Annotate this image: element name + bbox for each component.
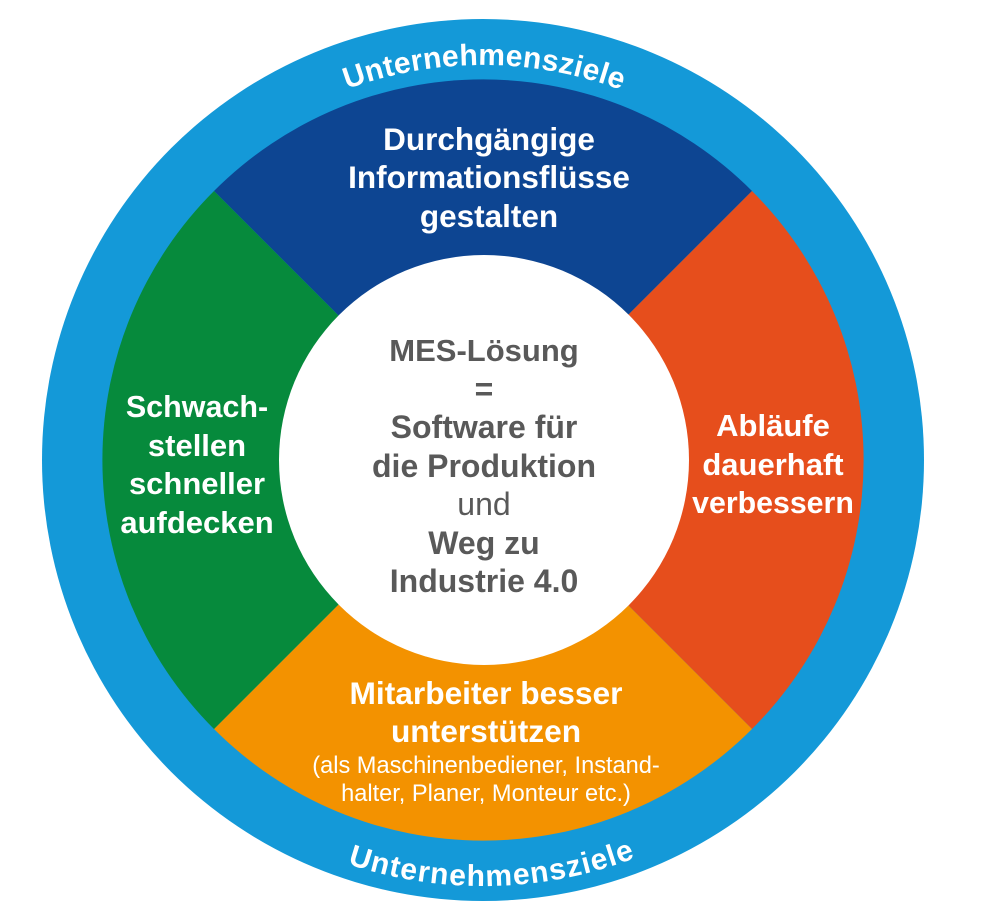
center circle: MES-Lösung: Weg zu — [428, 525, 540, 561]
segment: Schwachstellen schneller aufdecken — [102, 191, 483, 729]
segment: Schwachstellen schneller aufdecken: Schwach- — [126, 390, 268, 424]
ring label top: Unternehmensziele — [342, 44, 624, 88]
segment: Mitarbeiter besser unterstützen: Mitarbeiter besser — [350, 675, 622, 711]
center circle: MES-Lösung: und — [457, 486, 511, 522]
center circle: MES-Lösung: Industrie 4.0 — [390, 563, 578, 599]
segment: Durchgängige Informationsflüsse gestalten: Informationsflüsse — [348, 159, 630, 195]
center circle: MES-Lösung: Software für — [391, 409, 577, 445]
segment: Mitarbeiter besser unterstützen: halter, Planer, Monteur etc.) — [341, 781, 631, 807]
segment: Schwachstellen schneller aufdecken: stellen — [148, 428, 246, 463]
ring label bottom: Unternehmensziele — [350, 844, 633, 886]
segment: Mitarbeiter besser unterstützen: (als Maschinenbediener, Instand- — [312, 753, 660, 779]
segment: Abläufe dauerhaft verbessern: Abläufe — [716, 408, 830, 443]
segment: Schwachstellen schneller aufdecken: aufdecken — [120, 505, 274, 540]
segment: Mitarbeiter besser unterstützen — [214, 460, 752, 841]
segment: Abläufe dauerhaft verbessern: dauerhaft — [702, 447, 844, 482]
center circle: MES-Lösung: = — [475, 371, 493, 407]
segment: Durchgängige Informationsflüsse gestalten — [214, 79, 752, 460]
center circle: MES-Lösung: MES-Lösung — [389, 333, 579, 368]
center circle: MES-Lösung — [279, 255, 689, 665]
segment: Durchgängige Informationsflüsse gestalten: gestalten — [420, 198, 558, 234]
segment: Durchgängige Informationsflüsse gestalten: Durchgängige — [383, 121, 595, 157]
segment: Abläufe dauerhaft verbessern: verbessern — [692, 487, 854, 520]
segment: Abläufe dauerhaft verbessern — [483, 191, 864, 729]
segment: Schwachstellen schneller aufdecken: schneller — [129, 466, 265, 501]
center circle: MES-Lösung: die Produktion — [372, 448, 596, 484]
segment: Mitarbeiter besser unterstützen: unterstützen — [391, 713, 581, 749]
